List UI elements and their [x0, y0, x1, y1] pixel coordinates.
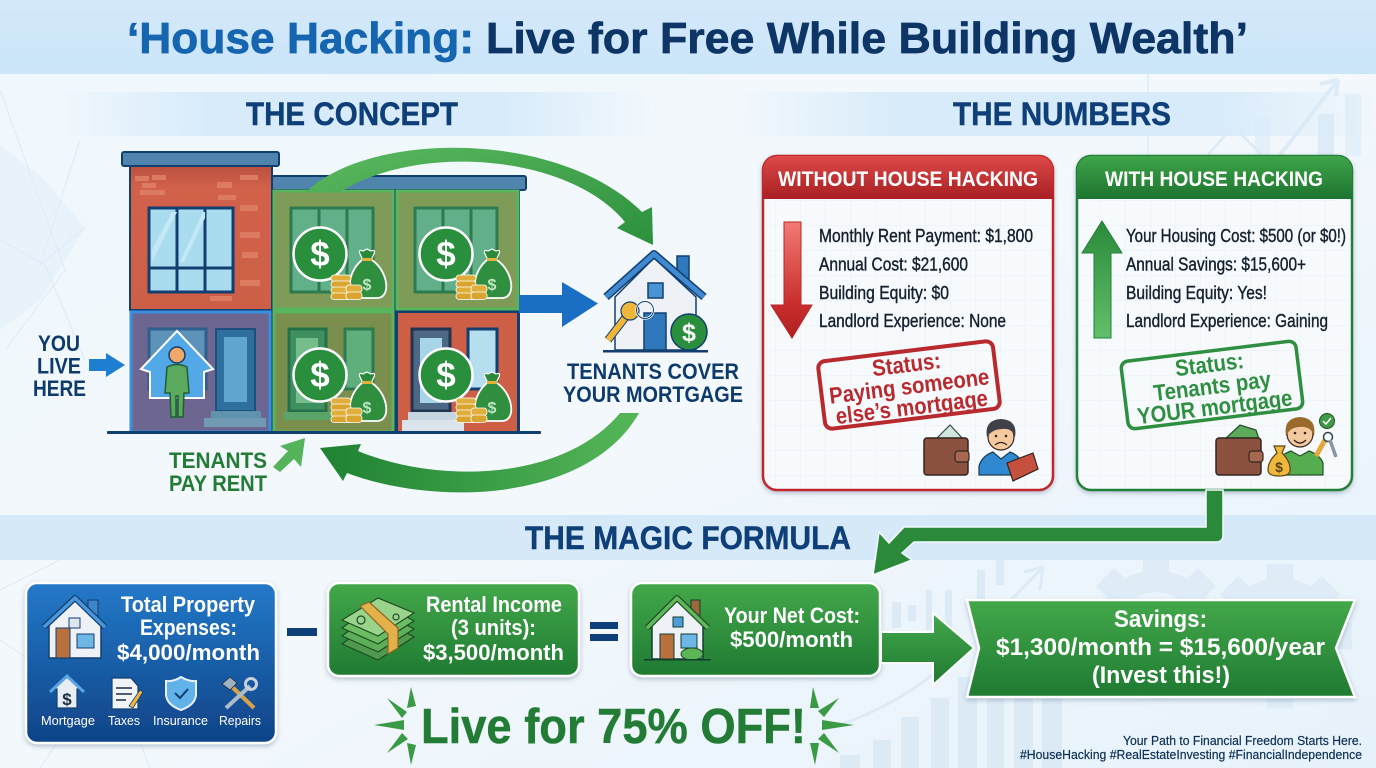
- stats list: [1126, 226, 1346, 331]
- stats list: Annual Cost: $21,600: [819, 254, 968, 274]
- title banner: Live for Free While Building Wealth’: [486, 14, 1248, 63]
- box text: [117, 592, 260, 665]
- box text: $3,500/month: [423, 640, 564, 665]
- stats list: Building Equity: Yes!: [1126, 283, 1267, 303]
- box text: Your Net Cost:: [724, 603, 860, 628]
- burst: right: [810, 687, 854, 765]
- arrow: up green: [1082, 221, 1122, 338]
- icon labels: Repairs: [219, 714, 261, 728]
- box text: $4,000/month: [117, 640, 260, 665]
- stats list: Landlord Experience: None: [819, 311, 1006, 331]
- icon: happy person with keys: [1276, 414, 1336, 475]
- arrow: to savings: [881, 613, 974, 685]
- arrow: down red: [771, 222, 812, 338]
- upper roof: [122, 152, 279, 166]
- label: tenants pay rent: PAY RENT: [169, 471, 268, 496]
- savings ribbon: [967, 600, 1355, 697]
- box text: Expenses:: [140, 615, 237, 640]
- box text: [423, 592, 564, 665]
- stats list: [819, 226, 1033, 331]
- label: tenants cover your mortgage: [563, 359, 743, 407]
- stats list: Monthly Rent Payment: $1,800: [819, 226, 1033, 246]
- box text: Total Property: [121, 592, 256, 617]
- unit: bottom right: [397, 312, 518, 432]
- status stamp: [818, 341, 1001, 430]
- panel header: [763, 156, 1053, 199]
- panel: without house hacking: [763, 156, 1053, 490]
- unit: you live here: [131, 312, 270, 432]
- unit: bottom middle: $: [310, 356, 330, 395]
- ground line: [107, 431, 541, 434]
- formula box: rental income: [328, 583, 579, 676]
- icon: mortgage: $: [62, 690, 72, 709]
- stats list: Landlord Experience: Gaining: [1126, 311, 1328, 331]
- arrow: green elbow to net cost: [873, 490, 1223, 575]
- unit: top middle: $: [310, 235, 330, 274]
- panel: without house hacking: WITHOUT HOUSE HACKING: [778, 168, 1038, 191]
- building illustration: [107, 152, 541, 434]
- icon: house with key and coin: [603, 254, 708, 352]
- unit: bottom right: $: [488, 400, 497, 417]
- label: tenants pay rent: TENANTS: [169, 448, 267, 473]
- icon: house with key and coin: $: [682, 319, 696, 347]
- footer tagline: Your Path to Financial Freedom Starts Here.: [1123, 734, 1362, 748]
- footer tagline: [1020, 734, 1362, 762]
- box text: [724, 603, 860, 652]
- formula box: net cost: [631, 583, 880, 676]
- heading: the numbers: THE NUMBERS: [953, 96, 1171, 132]
- stats list: Building Equity: $0: [819, 283, 949, 303]
- tower window: [149, 208, 233, 292]
- savings ribbon: Savings:: [1114, 606, 1207, 633]
- status stamp: Tenants pay: [1152, 366, 1272, 406]
- formula box: total property expenses: [26, 583, 276, 743]
- icon: house: [44, 598, 105, 658]
- operator: equals: [590, 622, 618, 641]
- icon labels: Insurance: [153, 714, 208, 728]
- icon: worried person: [979, 419, 1038, 481]
- title banner: ‘House Hacking:: [127, 14, 474, 63]
- arrow: you live here: [89, 353, 125, 377]
- icon: money bag: [1268, 446, 1290, 476]
- label: tenants pay rent: [169, 448, 268, 496]
- icon labels: [41, 714, 261, 728]
- tower brick wall: [130, 166, 272, 310]
- icon: money bag: $: [1275, 459, 1283, 475]
- icon: repairs: [222, 677, 256, 708]
- unit: bottom middle: [274, 312, 393, 432]
- title banner: [0, 0, 1376, 74]
- panel: with house hacking: [1077, 156, 1352, 490]
- icon: cash stack: [342, 598, 414, 660]
- operator: minus: [287, 628, 317, 636]
- unit: top right: [397, 191, 518, 309]
- status stamp: YOUR mortgage: [1136, 384, 1294, 429]
- icon: empty wallet: [924, 425, 969, 475]
- savings ribbon: $1,300/month = $15,600/year: [996, 634, 1325, 661]
- panel body: [763, 156, 1053, 490]
- icon: insurance: [166, 677, 196, 710]
- label: you live here: HERE: [33, 376, 86, 401]
- status stamp: Status:: [871, 347, 942, 381]
- panel header: [1077, 156, 1352, 199]
- heading: the magic formula: THE MAGIC FORMULA: [525, 520, 851, 556]
- status stamp: else’s mortgage: [834, 385, 989, 429]
- icon: full wallet: [1216, 425, 1263, 475]
- panel: with house hacking: WITH HOUSE HACKING: [1105, 168, 1323, 191]
- icon: green house: [644, 598, 711, 660]
- heading: the concept: THE CONCEPT: [246, 96, 458, 132]
- box text: $500/month: [730, 627, 853, 652]
- arrow: bottom arc back to building: [320, 413, 639, 492]
- label: you live here: [33, 331, 86, 401]
- status stamp: Status:: [1174, 347, 1245, 381]
- callout: live for 75% off: [374, 687, 854, 765]
- arrow: tenants pay rent up to mortgage (top arc): [306, 148, 653, 245]
- unit: top middle: $: [363, 277, 372, 294]
- icon labels: Mortgage: [41, 714, 95, 728]
- building frame: [130, 190, 520, 433]
- box text: Rental Income: [426, 592, 562, 617]
- arrow: to mortgage: [519, 282, 598, 327]
- stats list: Annual Savings: $15,600+: [1126, 254, 1306, 274]
- label: tenants cover your mortgage: TENANTS COVER: [567, 359, 739, 384]
- savings ribbon: (Invest this!): [1092, 662, 1230, 689]
- status stamp: Paying someone: [828, 363, 991, 409]
- burst: left: [374, 687, 416, 765]
- unit: top middle: [274, 191, 393, 309]
- unit: bottom middle: $: [363, 400, 372, 417]
- icon labels: Taxes: [108, 714, 140, 728]
- label: you live here: YOU: [38, 331, 80, 356]
- footer tagline: #HouseHacking #RealEstateInvesting #FinancialIndependence: [1020, 748, 1362, 762]
- lower roof: [272, 176, 526, 190]
- panel body: [1077, 156, 1352, 490]
- label: tenants cover your mortgage: YOUR MORTGAGE: [563, 382, 743, 407]
- section bands: [0, 92, 1376, 560]
- icon: taxes: [112, 678, 143, 709]
- unit: bottom right: $: [436, 356, 456, 395]
- box text: (3 units):: [451, 615, 536, 640]
- unit: top right: $: [488, 277, 497, 294]
- callout: live for 75% off: Live for 75% OFF!: [421, 700, 806, 754]
- icon: mortgage: [50, 676, 84, 709]
- unit: top right: $: [436, 235, 456, 274]
- arrow: tenants pay rent small: [273, 438, 305, 472]
- label: you live here: LIVE: [37, 354, 81, 378]
- status stamp: [1121, 341, 1304, 430]
